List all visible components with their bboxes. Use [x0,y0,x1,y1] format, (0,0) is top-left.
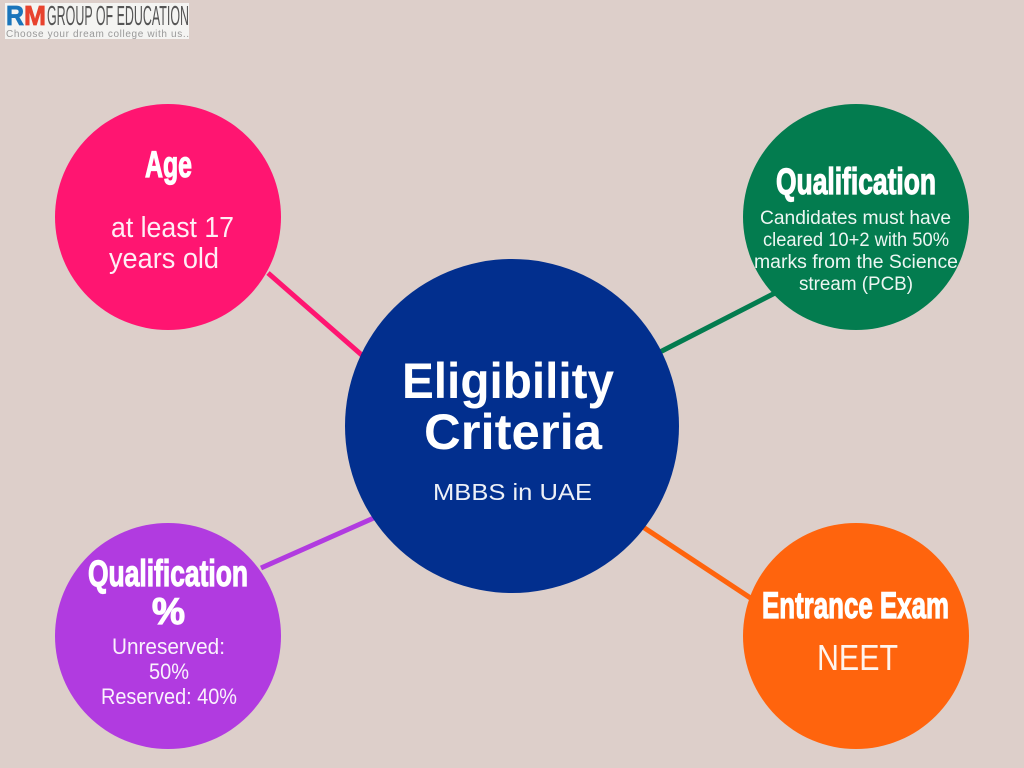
infographic canvas: GROUP OF EDUCATION [47,0,189,31]
title: eligibility criteria [402,353,614,460]
heading: qualification percentage: Qualification [88,553,248,594]
text: qualification requirement: marks from the Science [754,252,958,273]
logo: RM Group of Education: Choose your dream college with us.. [6,29,189,40]
panel: entrance exam [743,523,969,749]
text: percentage requirements: Reserved: 40% [101,684,237,709]
panel: age [55,104,281,330]
heading: entrance exam: Entrance Exam [762,585,949,626]
text: qualification requirement: cleared 10+2 with 50% [763,230,949,251]
title: eligibility criteria: Criteria [424,404,603,460]
text: qualification requirement [754,208,958,295]
connector: entrance exam [643,527,752,599]
logo: RM Group of Education: R [6,0,24,31]
text: qualification requirement: stream (PCB) [799,274,913,295]
text: percentage requirements [101,634,237,709]
text: percentage requirements: Unreserved: [112,634,225,659]
text: age requirement: at least 17 [111,212,234,244]
text: qualification requirement: Candidates must have [760,208,951,229]
connector: qualification percentage [261,517,376,568]
logo: RM Group of Education [5,0,189,40]
heading: qualification: Qualification [776,161,936,202]
text: age requirement: years old [109,243,219,275]
panel: central hub [345,259,679,593]
panel: qualification [743,104,969,330]
title: eligibility criteria: Eligibility [402,353,614,409]
logo: RM Group of Education: M [24,0,46,31]
text: NEET: NEET [817,637,898,678]
subtitle: MBBS in UAE: MBBS in UAE [433,479,592,505]
text: percentage requirements: 50% [149,659,189,684]
heading: qualification percentage [88,553,248,632]
text: age requirement [109,212,234,275]
heading: age: Age [145,144,192,185]
connector: qualification [660,292,777,352]
connector: age [268,273,364,357]
panel: qualification percentage [55,523,281,749]
heading: qualification percentage: % [152,591,185,632]
